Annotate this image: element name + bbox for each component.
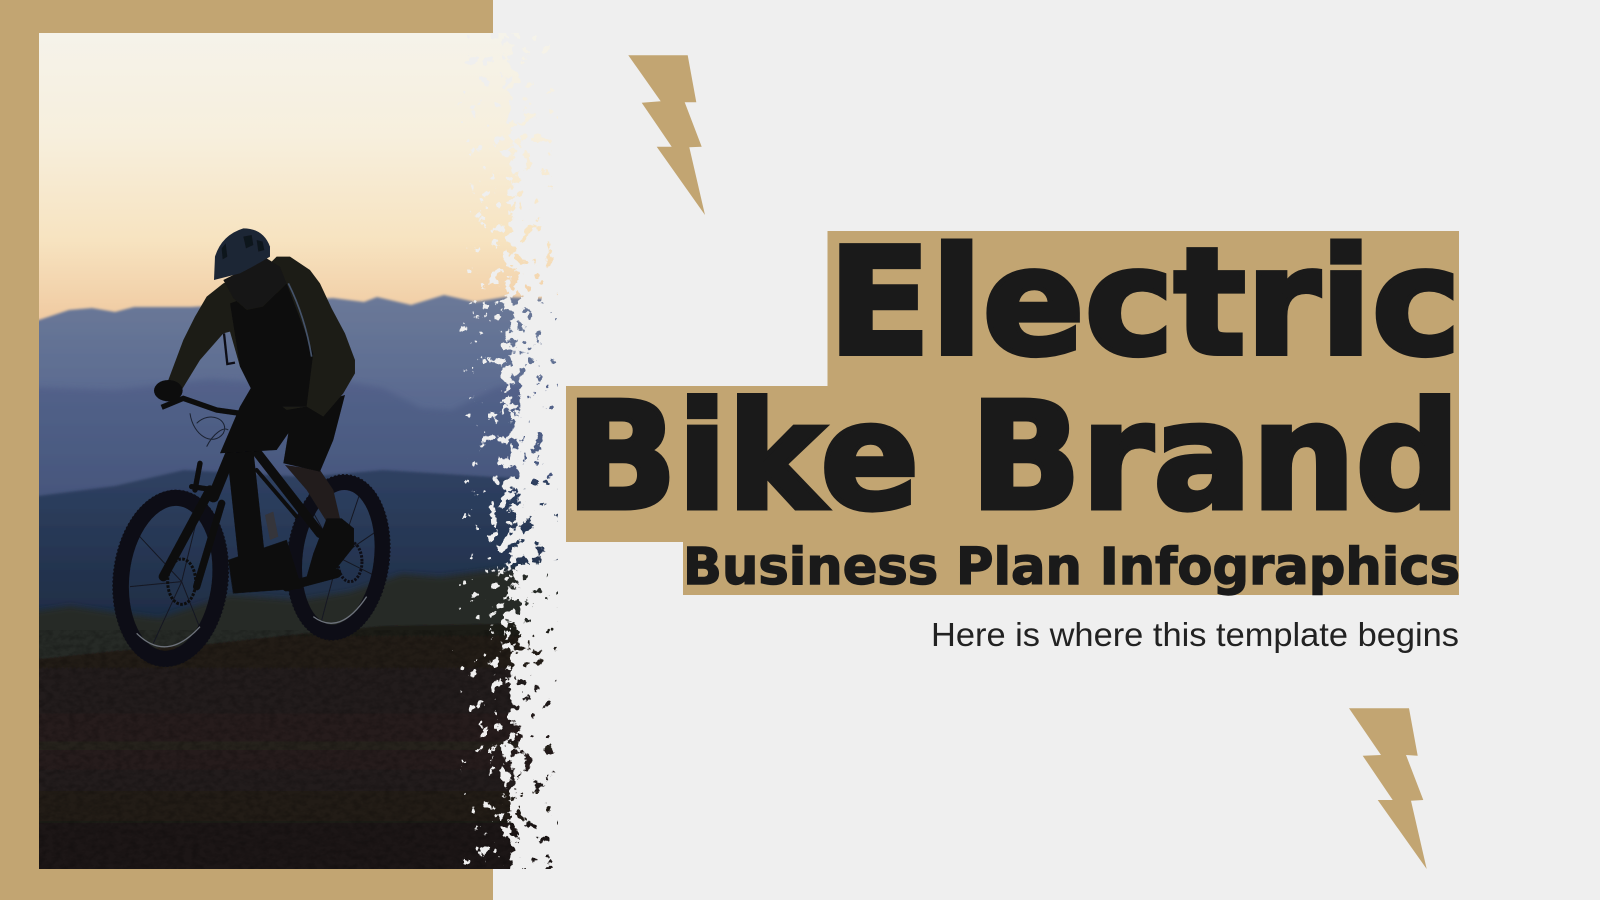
middle mountain ridge [39, 380, 558, 498]
upper body of rider [154, 228, 355, 472]
near mountain ridge [39, 470, 558, 622]
glove [154, 380, 183, 401]
rear wheel [278, 469, 399, 646]
icon: lightning bolt bottom [1349, 708, 1427, 869]
torso shadow [230, 283, 313, 407]
panel: brush stroke backing [440, 33, 493, 869]
front wheel [105, 485, 237, 672]
icon: lightning bolt top [628, 55, 705, 215]
hydration hose [288, 283, 312, 357]
handlebar [160, 396, 238, 416]
title line: Bike Brand: Bike Brand [566, 371, 1460, 543]
far mountain ridge [30, 295, 565, 420]
title line: Electric: Electric [828, 216, 1461, 388]
panel: photo of mountain biker at dusk [30, 33, 565, 875]
sky [39, 33, 558, 333]
brake cables [190, 413, 228, 447]
dirt trail [30, 620, 565, 875]
shoe [307, 518, 354, 577]
lower bike and legs [112, 450, 391, 667]
face and hair [223, 258, 287, 310]
dirt texture [50, 630, 290, 652]
calf [285, 465, 340, 522]
tagline: Here is where this template begins [931, 616, 1459, 653]
helmet [214, 228, 270, 280]
helmet vents [222, 235, 264, 259]
hanging strap [224, 333, 235, 364]
bike frame [163, 440, 337, 593]
title highlight block [566, 231, 1459, 595]
panel: gold photo frame [0, 0, 493, 900]
grass band [39, 566, 558, 660]
water bottle [265, 512, 278, 540]
shorts [220, 387, 345, 472]
jacket [168, 257, 355, 417]
subtitle: Business Plan Infographics: Business Plan Infographics [683, 538, 1460, 597]
